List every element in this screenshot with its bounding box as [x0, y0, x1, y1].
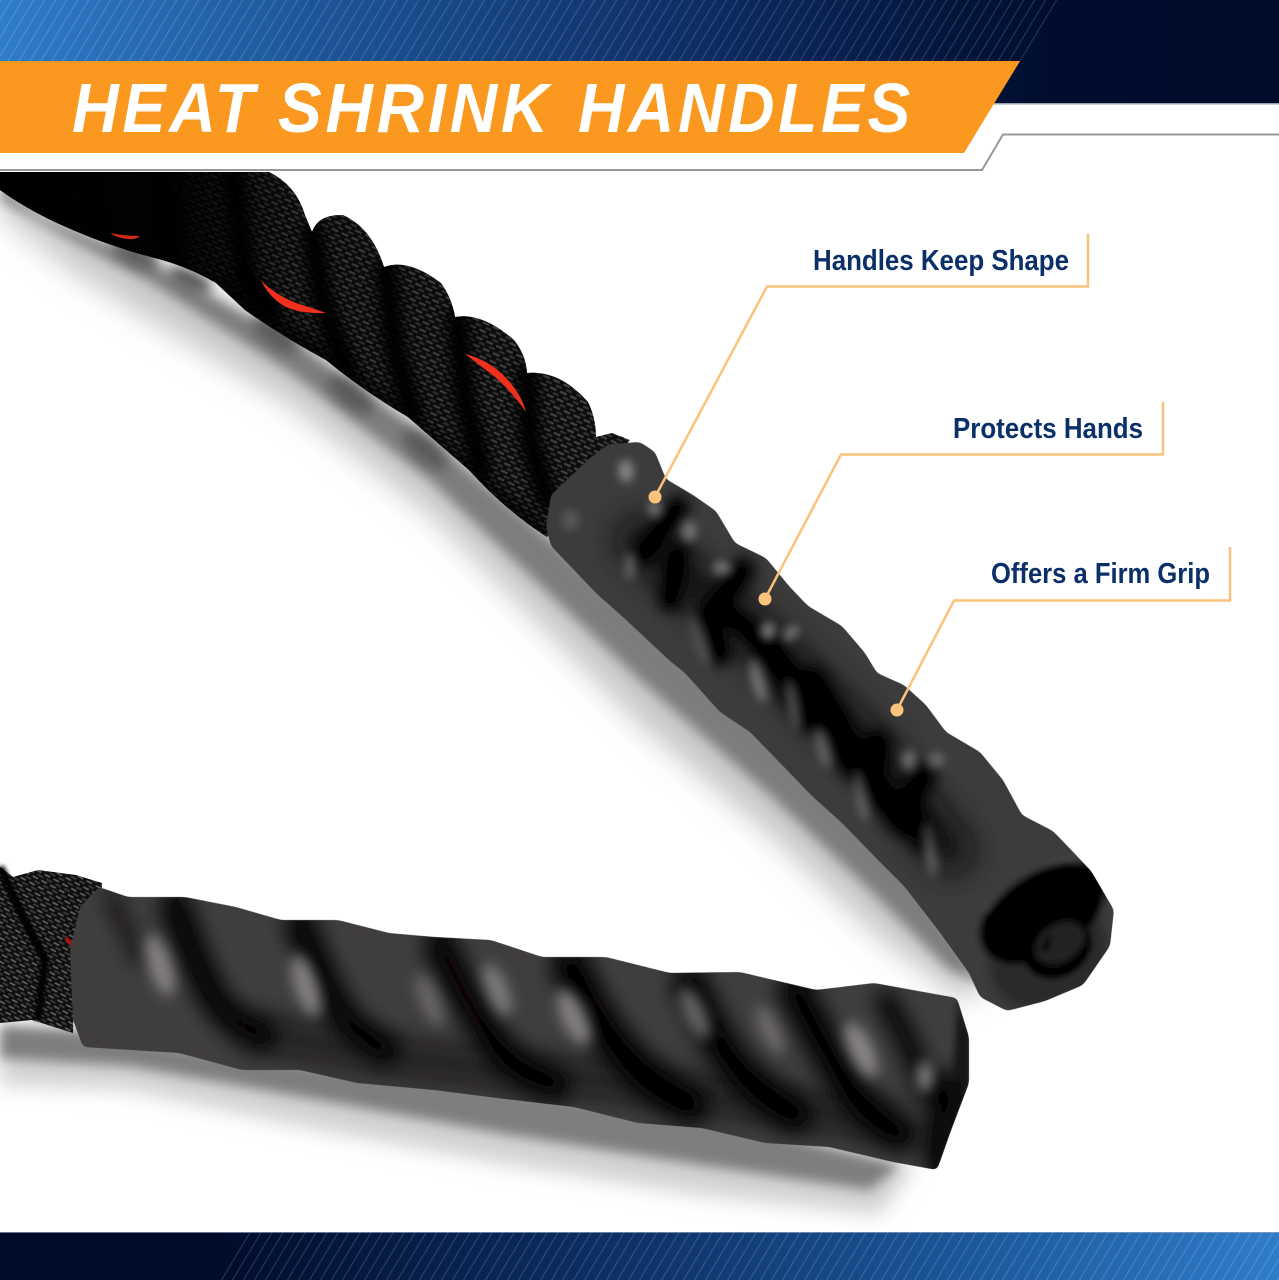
callout: Handles Keep Shape: Handles Keep Shape — [813, 245, 1069, 277]
shadow of upper rope and handle — [0, 185, 990, 1000]
rope upper section — [0, 170, 640, 550]
broad dark core — [640, 540, 950, 850]
callout: Protects Hands: Protects Hands — [953, 413, 1143, 445]
shadow of lower handle — [0, 1025, 915, 1215]
handle end cap — [977, 856, 1112, 1010]
footer band — [0, 1232, 1279, 1280]
rope lower section — [0, 867, 102, 1033]
title banner — [0, 61, 1020, 153]
callout: Offers a Firm Grip — [890, 547, 1230, 716]
upper handle — [546, 442, 1126, 1029]
red tracer strands — [110, 233, 526, 412]
gray outline under title banner — [0, 134, 1279, 170]
callout: Protects Hands — [758, 402, 1163, 606]
callout: Handles Keep Shape — [648, 234, 1088, 504]
callout: Offers a Firm Grip: Offers a Firm Grip — [991, 558, 1210, 590]
header band — [0, 0, 1279, 104]
title: HEAT — [72, 69, 259, 147]
lower handle — [70, 887, 969, 1170]
title: SHRINK — [278, 69, 552, 147]
title: HANDLES — [578, 69, 914, 147]
title — [72, 69, 914, 147]
